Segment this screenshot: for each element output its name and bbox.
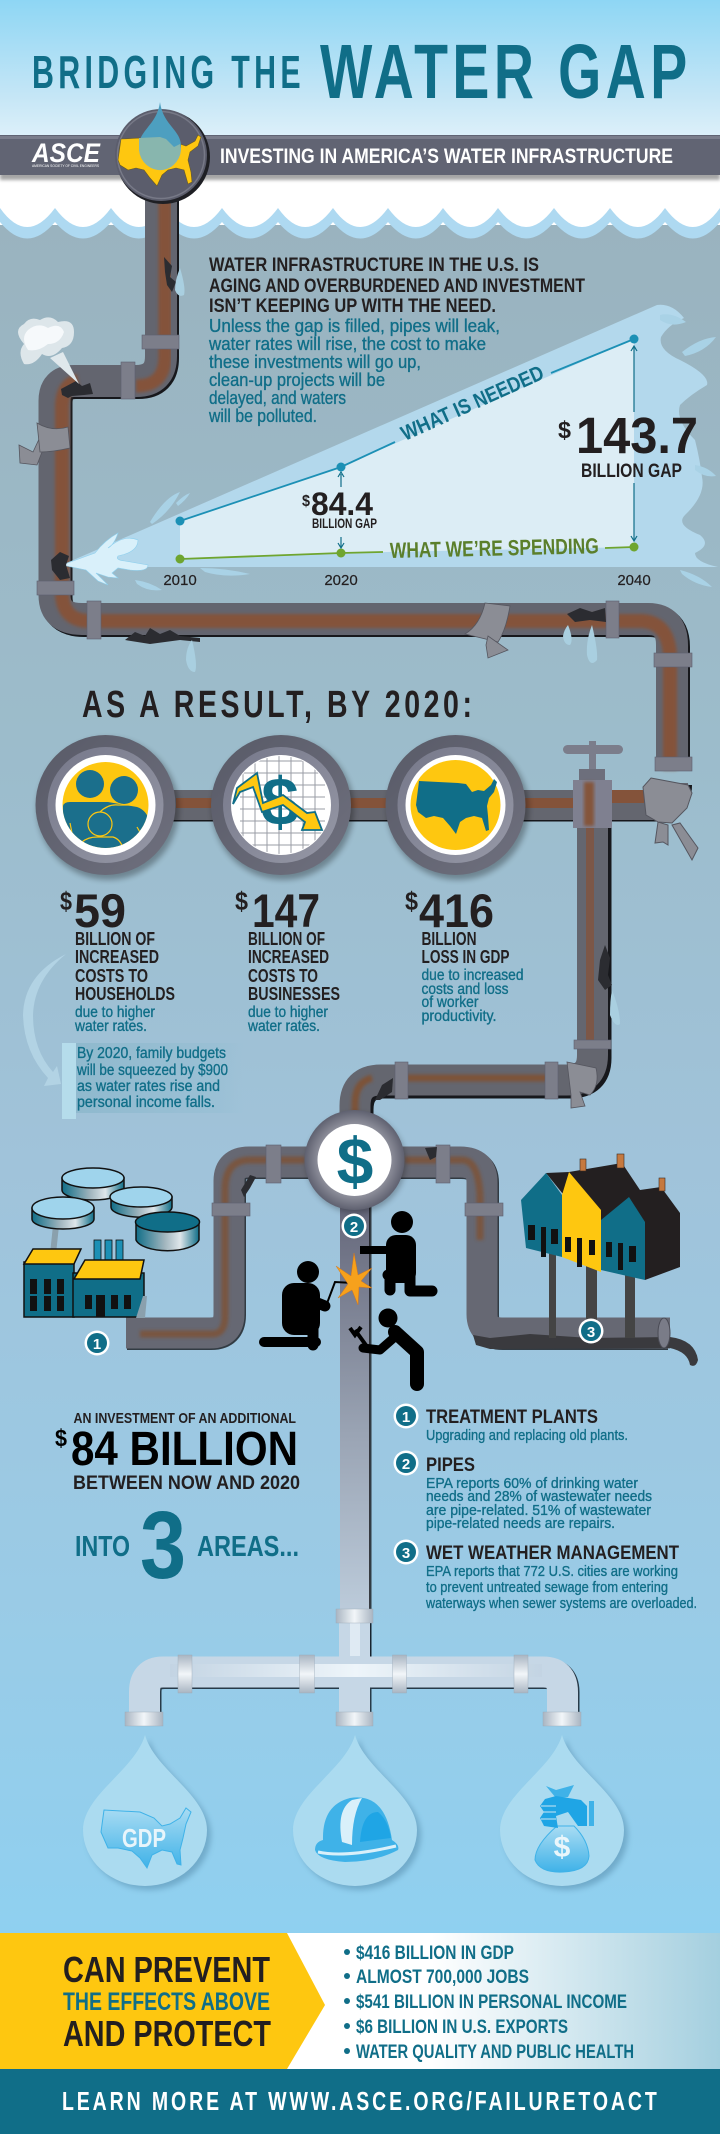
- value: 84.4 billion gap: [302, 486, 377, 531]
- stat: 416 billion GDP: [405, 884, 524, 1025]
- driller: [360, 1211, 432, 1291]
- pipes through circles and faucet: [105, 783, 677, 1130]
- rust bands on pipes: [176, 790, 644, 1043]
- badge 1: [84, 1330, 110, 1356]
- investment text: $: [55, 1425, 68, 1452]
- footer: LEARN MORE AT WWW.ASCE.ORG/FAILURETOACT: [62, 2086, 657, 2116]
- item 2: pipes: EPA reports 60% of drinking water: [426, 1475, 638, 1492]
- stat: 147 billion businesses: BILLION OF: [248, 929, 325, 949]
- prevent text: AND PROTECT: [63, 2013, 271, 2054]
- prevent text: CAN PREVENT: [63, 1949, 270, 1990]
- title: BRIDGING THE: [32, 48, 301, 99]
- investment text: INTO: [75, 1531, 130, 1563]
- pipe collars upper: [37, 335, 692, 771]
- gap area: [180, 339, 634, 559]
- stat: 59 billion households: $: [60, 886, 72, 916]
- item 3: wet weather management: [394, 1540, 697, 1612]
- waves: [0, 175, 720, 238]
- benefit list: $416 BILLION IN GDP: [356, 1943, 514, 1964]
- list of three areas: [394, 1404, 697, 1612]
- bandage on upper elbow: [567, 1062, 597, 1108]
- stat: 416 billion GDP: due to increased: [422, 967, 524, 984]
- gap arrows: [338, 346, 637, 548]
- item 3: wet weather management: to prevent untreated sewage from entering: [426, 1579, 668, 1596]
- medallion: water drop over USA: [115, 102, 210, 204]
- stat: 59 billion households: 59: [74, 884, 126, 937]
- footer: [0, 2069, 720, 2134]
- investment text: [55, 1410, 300, 1599]
- intro text: these investments will go up,: [209, 352, 421, 372]
- stat: 59 billion households: [60, 884, 175, 1035]
- stat: 59 billion households: BILLION OF: [75, 929, 155, 949]
- stat: 147 billion businesses: INCREASED: [248, 947, 329, 967]
- intro text: delayed, and waters: [209, 388, 346, 408]
- wound on elbow: [375, 1078, 393, 1100]
- ASCE logo: ASCE: [31, 138, 101, 168]
- stat: 59 billion households: HOUSEHOLDS: [75, 984, 175, 1004]
- tank: [32, 1208, 94, 1229]
- value: 143.7 billion gap: $: [558, 417, 572, 444]
- investment text: BETWEEN NOW AND 2020: [73, 1473, 300, 1494]
- investment text: 84 BILLION: [71, 1423, 298, 1476]
- drop: GDP: [83, 1735, 211, 1890]
- badge 3: 3: [587, 1324, 595, 1341]
- stat: 147 billion businesses: COSTS TO: [248, 966, 318, 986]
- benefit list: WATER QUALITY AND PUBLIC HEALTH: [356, 2042, 634, 2063]
- title: WATER GAP: [320, 29, 687, 115]
- benefit list: [344, 1943, 634, 2063]
- collars: [125, 1609, 581, 1726]
- drop: hard hat: [293, 1735, 421, 1890]
- item 2: pipes: [394, 1450, 652, 1532]
- steam cloud: [18, 317, 79, 384]
- stat circle: GDP: [386, 735, 529, 880]
- wrench worker: [350, 1308, 417, 1384]
- intro text: ISN’T KEEPING UP WITH THE NEED.: [209, 296, 496, 317]
- callout: family budgets: personal income falls.: [77, 1094, 215, 1111]
- leak drips upper: [175, 268, 597, 672]
- stat: 59 billion households: water rates.: [74, 1018, 147, 1035]
- medallion: dollar: [304, 1110, 406, 1213]
- stat: 59 billion households: COSTS TO: [75, 966, 148, 986]
- spark: [336, 1253, 372, 1305]
- stat: 416 billion GDP: 416: [419, 884, 494, 937]
- stat circle: businesses: $: [261, 764, 299, 840]
- stat: 147 billion businesses: $: [235, 886, 248, 916]
- item 3: wet weather management: EPA reports that 772 U.S. cities are working: [426, 1563, 678, 1580]
- years axis: 2010: [163, 572, 197, 589]
- stat: 416 billion GDP: BILLION: [422, 929, 476, 949]
- intro text: [208, 255, 585, 426]
- header bar: [0, 135, 720, 180]
- pipe collars lower: [395, 1040, 611, 1099]
- value: 143.7 billion gap: 143.7: [576, 407, 698, 464]
- stat: 416 billion GDP: costs and loss: [422, 981, 509, 998]
- intro text: Unless the gap is filled, pipes will leak,: [209, 316, 500, 336]
- prevent text: [63, 1949, 271, 2054]
- stat: 416 billion GDP: LOSS IN GDP: [422, 947, 510, 967]
- sludge overflow: [473, 1334, 698, 1366]
- badge 1: 1: [93, 1336, 101, 1353]
- badge 3: [578, 1318, 604, 1344]
- item 1: treatment plants: TREATMENT PLANTS: [426, 1407, 598, 1428]
- stat: 147 billion businesses: BUSINESSES: [248, 984, 340, 1004]
- stat: 59 billion households: INCREASED: [75, 947, 159, 967]
- callout: family budgets: [62, 1043, 243, 1119]
- stat circle: households: [36, 735, 179, 880]
- water spray: [62, 305, 718, 567]
- item 2: pipes: needs and 28% of wastewater needs: [426, 1488, 652, 1505]
- curved arrow to callout: [23, 954, 66, 1086]
- stat: 147 billion businesses: 147: [252, 884, 320, 937]
- investment text: 3: [140, 1492, 186, 1599]
- medallion: dollar: $: [337, 1124, 373, 1198]
- value: 84.4 billion gap: $: [302, 493, 310, 510]
- value: 84.4 billion gap: 84.4: [311, 486, 373, 522]
- item 1: treatment plants: Upgrading and replacing old plants.: [426, 1427, 628, 1444]
- icon: water treatment plant: [24, 1168, 200, 1318]
- tank: [62, 1178, 124, 1200]
- value: 84.4 billion gap: BILLION GAP: [312, 516, 377, 531]
- stat: 416 billion GDP: of worker: [422, 994, 478, 1011]
- drop: GDP: GDP: [122, 1823, 166, 1853]
- pipe damage lower: [598, 945, 612, 990]
- yellow arrow: [0, 1933, 325, 2069]
- value: 143.7 billion gap: [558, 407, 698, 482]
- faucet: [563, 741, 623, 828]
- chart: water gap: [62, 305, 718, 590]
- intro text: will be polluted.: [208, 406, 317, 426]
- stat: 147 billion businesses: [235, 884, 340, 1035]
- what is needed line: [180, 339, 634, 521]
- bandage on right pipe: [643, 778, 698, 860]
- wounds: [241, 1147, 437, 1197]
- benefit list: $6 BILLION IN U.S. EXPORTS: [356, 2017, 568, 2038]
- clean pipe system: [125, 1609, 581, 1726]
- stat circle: businesses: [211, 735, 354, 880]
- years axis: 2040: [617, 572, 651, 589]
- stat: 416 billion GDP: productivity.: [422, 1008, 496, 1025]
- droplets: [135, 314, 716, 590]
- item 3: wet weather management: 3: [402, 1545, 410, 1562]
- title: [32, 29, 687, 115]
- value: 143.7 billion gap: BILLION GAP: [581, 461, 682, 482]
- badge 2: 2: [350, 1219, 358, 1236]
- ASCE logo: AMERICAN SOCIETY OF CIVIL ENGINEERS: [32, 163, 99, 168]
- intro text: WATER INFRASTRUCTURE IN THE U.S. IS: [209, 255, 539, 276]
- item 3: wet weather management: WET WEATHER MANAGEMENT: [426, 1543, 679, 1564]
- stat: 59 billion households: due to higher: [75, 1004, 155, 1021]
- callout: family budgets: as water rates rise and: [77, 1078, 220, 1095]
- item 2: pipes: pipe-related needs are repairs.: [426, 1515, 615, 1532]
- tank: [111, 1197, 172, 1217]
- benefit list: $541 BILLION IN PERSONAL INCOME: [356, 1992, 627, 2013]
- stat: 147 billion businesses: due to higher: [248, 1004, 328, 1021]
- upper leaking pipe: [54, 200, 674, 770]
- item 2: pipes: PIPES: [426, 1455, 475, 1476]
- series label: what we're spending: WHAT WE’RE SPENDING: [390, 533, 599, 563]
- item 2: pipes: 2: [402, 1456, 410, 1473]
- intro text: clean-up projects will be: [209, 370, 385, 390]
- callout: family budgets: By 2020, family budgets: [77, 1045, 226, 1062]
- series label: what is needed: WHAT IS NEEDED: [398, 361, 548, 446]
- tank: [136, 1222, 199, 1251]
- item 1: treatment plants: 1: [402, 1409, 410, 1426]
- stat: 416 billion GDP: $: [405, 886, 418, 916]
- drop: money bag: [500, 1735, 628, 1890]
- welder: [264, 1261, 354, 1345]
- stat: 147 billion businesses: water rates.: [247, 1018, 320, 1035]
- repair pipes: [126, 1160, 670, 1334]
- duct tape bandages: [19, 423, 510, 658]
- pipe damage: [51, 257, 606, 644]
- item 1: treatment plants: [394, 1404, 628, 1444]
- investment text: AREAS...: [197, 1531, 299, 1563]
- icon: houses: [521, 1154, 680, 1338]
- prevent text: THE EFFECTS ABOVE: [63, 1988, 270, 2016]
- drop: money bag: $: [554, 1831, 571, 1864]
- badge 2: [342, 1214, 366, 1238]
- collars mid: [212, 1145, 503, 1216]
- years axis: [163, 572, 651, 589]
- callout: family budgets: will be squeezed by $900: [76, 1062, 228, 1079]
- years axis: 2020: [324, 572, 358, 589]
- splash at leak: [62, 533, 148, 585]
- icon: workers repairing pipe: [264, 1211, 432, 1384]
- benefit list: ALMOST 700,000 JOBS: [356, 1967, 529, 1988]
- bottom panel: [0, 1933, 720, 2069]
- what we're spending line: [180, 547, 634, 559]
- heading: as a result: AS A RESULT, BY 2020:: [82, 684, 472, 726]
- investment text: AN INVESTMENT OF AN ADDITIONAL: [74, 1410, 296, 1427]
- item 2: pipes: are pipe-related. 51% of wastewater: [426, 1502, 651, 1519]
- intro text: water rates will rise, the cost to make: [208, 334, 486, 354]
- main stem: [340, 1205, 370, 1665]
- intro text: AGING AND OVERBURDENED AND INVESTMENT: [209, 276, 585, 297]
